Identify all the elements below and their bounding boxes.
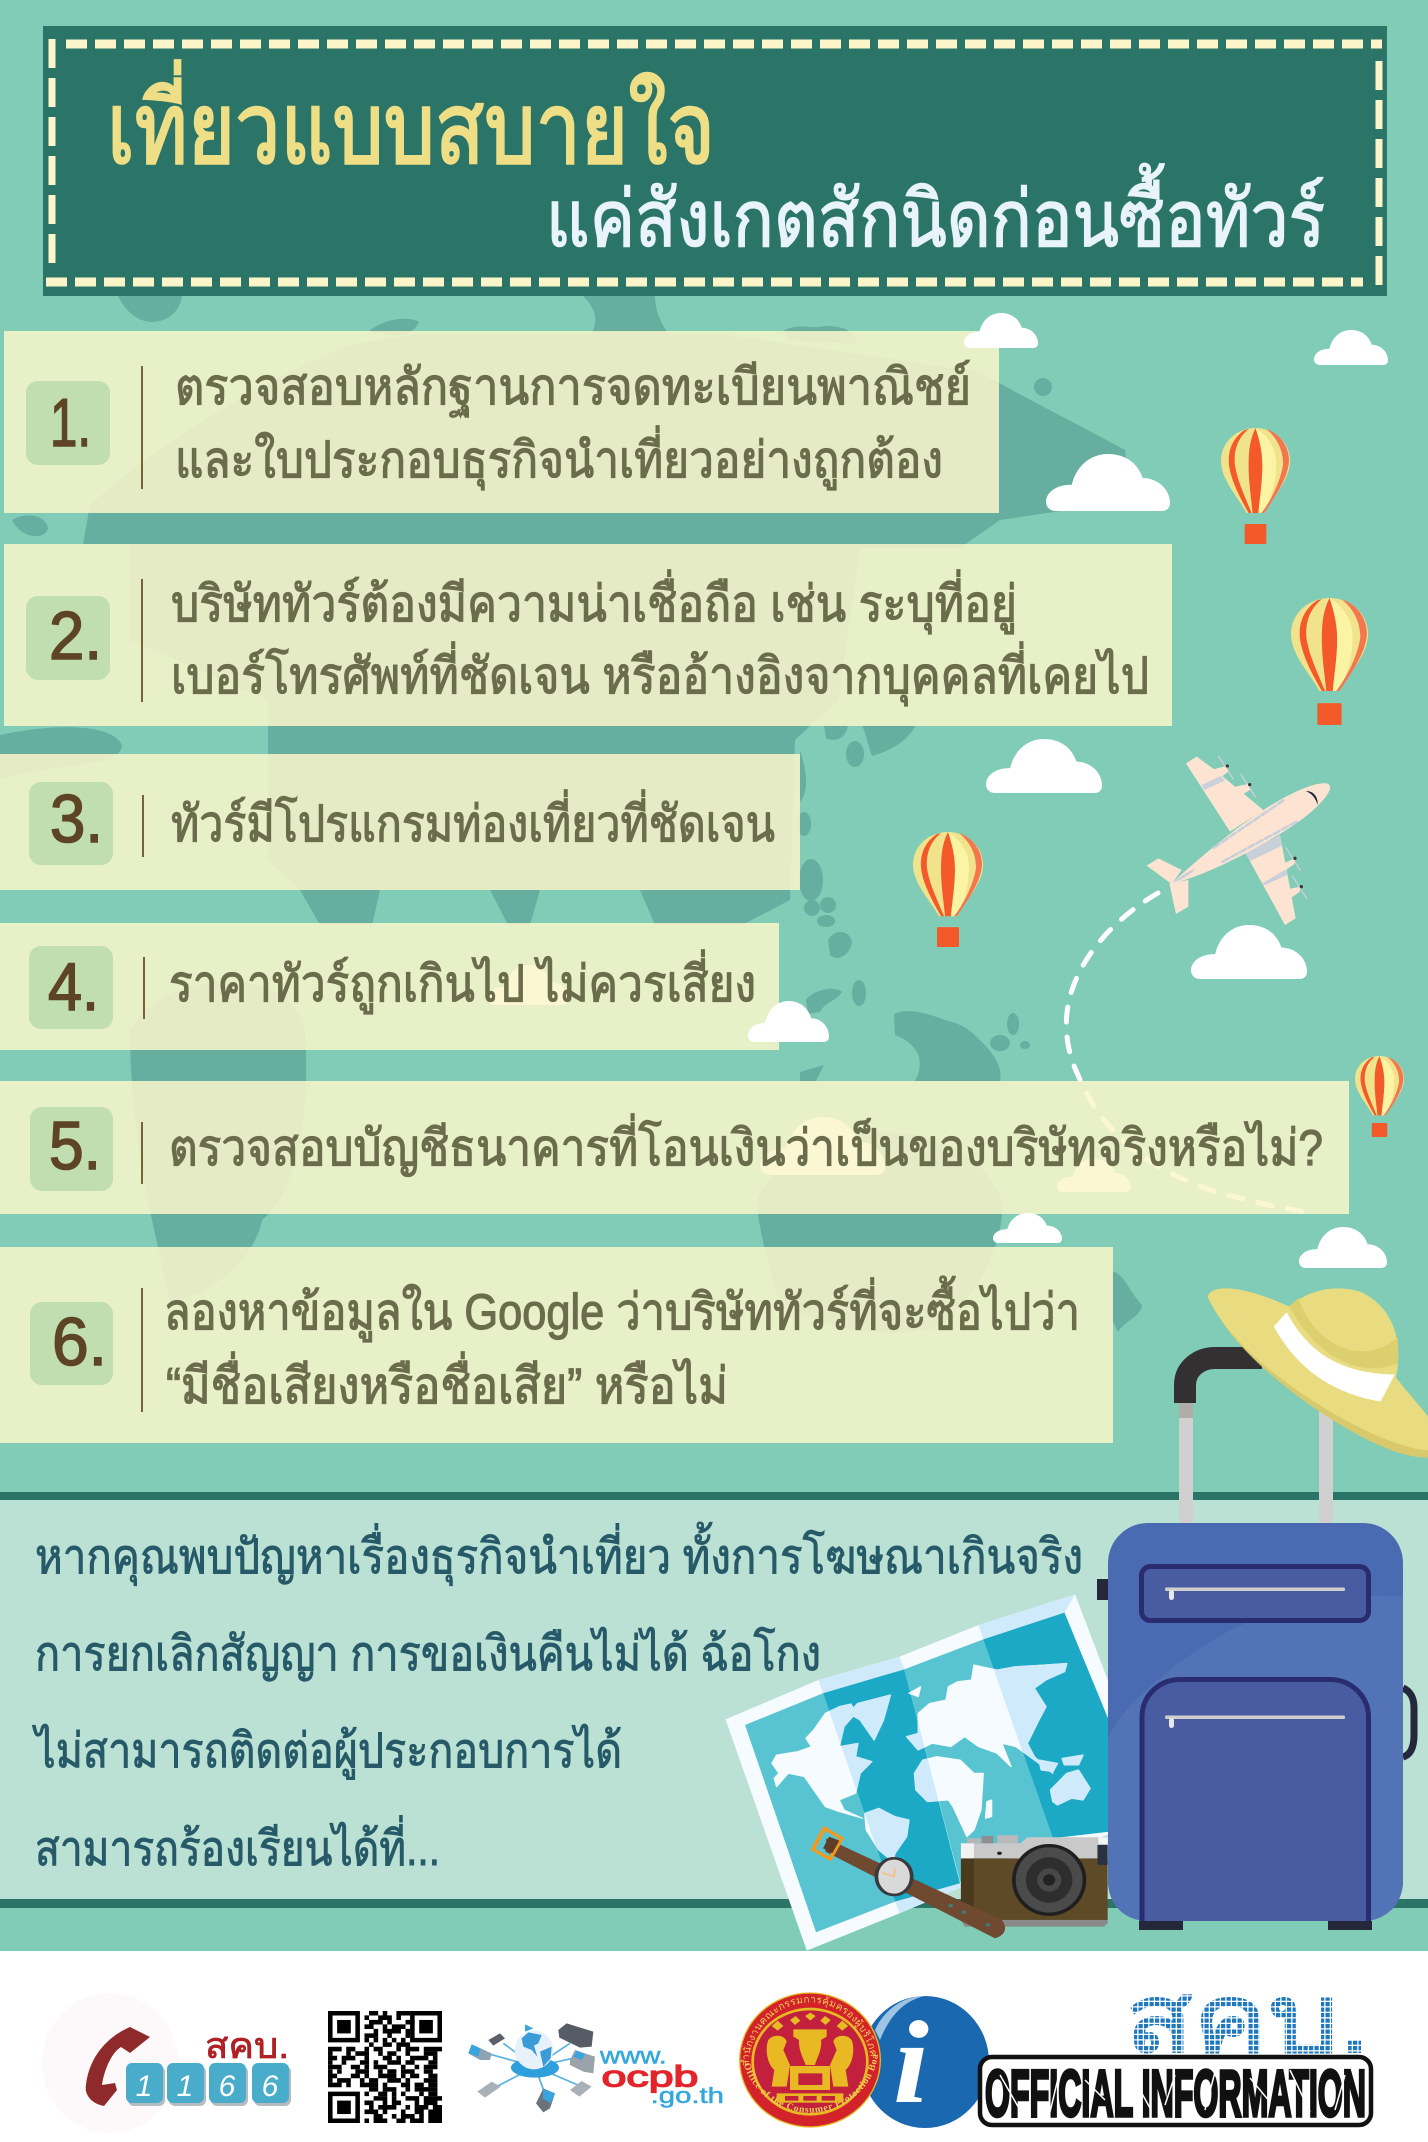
panel 6 bbox=[0, 1247, 1113, 1443]
panel 6 text: ลองหาข้อมูลใน Google ว่าบริษัททัวร์ที่จะซื้อไปว่า bbox=[164, 1276, 1080, 1342]
balloon 2 bbox=[1291, 598, 1368, 725]
balloon 1 bbox=[1221, 428, 1290, 544]
flight path line bbox=[1066, 893, 1305, 1212]
panel 1 text: ตรวจสอบหลักฐานการจดทะเบียนพาณิชย์ bbox=[175, 359, 971, 417]
panel 3 bbox=[0, 754, 800, 890]
number badge 1 bbox=[26, 381, 110, 465]
title banner bbox=[43, 26, 1387, 296]
clouds bbox=[748, 313, 1388, 1268]
panel 4 text: ราคาทัวร์ถูกเกินไป ไม่ควรเสี่ยง bbox=[169, 950, 756, 1014]
panel 3 text: ทัวร์มีโปรแกรมท่องเที่ยวที่ชัดเจน bbox=[171, 790, 775, 852]
number 5: 5. bbox=[49, 1108, 101, 1184]
title line 1: เที่ยวแบบสบายใจ bbox=[107, 60, 715, 185]
divider 6 bbox=[141, 1288, 143, 1412]
panel 1: และใบประกอบธุรกิจนำเที่ยวอย่างถูกต้อง bbox=[175, 426, 943, 490]
camera bbox=[961, 1835, 1108, 1927]
number badge 6 bbox=[30, 1302, 113, 1385]
panel 2 text: บริษัททัวร์ต้องมีความน่าเชื่อถือ เช่น ระบุที่อยู่ bbox=[171, 570, 1017, 634]
map continents bbox=[772, 1663, 1090, 1862]
contact band: การยกเลิกสัญญา การขอเงินคืนไม่ได้ ฉ้อโกง bbox=[35, 1626, 821, 1681]
panel 2: เบอร์โทรศัพท์ที่ชัดเจน หรืออ้างอิงจากบุคคลที่เคยไป bbox=[171, 642, 1149, 706]
panel 2 bbox=[4, 544, 1172, 726]
bottom pocket bbox=[1142, 1680, 1368, 1921]
number badge 2 bbox=[26, 596, 110, 680]
balloon 3 bbox=[913, 832, 983, 947]
number tiles: 1 bbox=[136, 2070, 152, 2103]
logo: information icon bbox=[861, 1996, 989, 2128]
number tiles bbox=[126, 2063, 291, 2106]
divider 4 bbox=[143, 957, 145, 1019]
balloon 4 bbox=[1355, 1056, 1404, 1137]
number badge 4 bbox=[29, 946, 113, 1029]
suitcase bbox=[1097, 1358, 1414, 1930]
logo: ocpb website: ocpb bbox=[602, 2061, 698, 2094]
title line 2: แค่สังเกตสักนิดก่อนซื้อทัวร์ bbox=[546, 163, 1325, 263]
world map silhouette bbox=[0, 296, 1142, 1333]
hotline agency text: สคบ. bbox=[205, 2025, 289, 2066]
seal of consumer protection board: Office of the Consumer Protection Board bbox=[744, 2054, 878, 2113]
logo: ocpb website bbox=[468, 2023, 724, 2112]
divider 5 bbox=[141, 1122, 143, 1184]
wristwatch bbox=[813, 1828, 1005, 1938]
number 3: 3. bbox=[50, 781, 103, 857]
number 1: 1. bbox=[50, 385, 91, 461]
number 4: 4. bbox=[48, 949, 99, 1025]
contact text: หากคุณพบปัญหาเรื่องธุรกิจนำเที่ยว ทั้งการโฆษณาเกินจริง bbox=[35, 1522, 1083, 1586]
folded world map bbox=[726, 1594, 1108, 1951]
footer background bbox=[0, 1951, 1428, 2142]
top pocket bbox=[1142, 1566, 1368, 1620]
divider 1 bbox=[141, 366, 143, 489]
panel 4 bbox=[0, 923, 779, 1050]
number badge 3 bbox=[29, 782, 113, 865]
logo: 1166 hotline bbox=[42, 1993, 291, 2133]
website text: www. bbox=[599, 2042, 667, 2068]
contact band: ไม่สามารถติดต่อผู้ประกอบการได้ bbox=[32, 1723, 622, 1780]
agency dotted wordmark: สคบ. bbox=[1125, 1966, 1370, 2073]
seal emblem bbox=[767, 2013, 853, 2103]
wheels bbox=[1139, 1921, 1183, 1930]
logo: ocpb website: .go.th bbox=[651, 2083, 724, 2108]
QR code bbox=[328, 2011, 442, 2123]
number 2: 2. bbox=[49, 598, 102, 674]
number badge 5 bbox=[30, 1107, 113, 1191]
ghost clouds beneath panels bbox=[488, 965, 1131, 1192]
hat bbox=[1208, 1288, 1428, 1458]
side fittings bbox=[1097, 1579, 1108, 1600]
panel 5 bbox=[0, 1081, 1349, 1214]
contact band bbox=[0, 1492, 1428, 1908]
handle bbox=[1185, 1358, 1262, 1403]
network icon bbox=[468, 2023, 595, 2112]
number tiles: 1 bbox=[177, 2070, 193, 2103]
panel 6: “มีชื่อเสียงหรือชื่อเสีย” หรือไม่ bbox=[166, 1352, 728, 1414]
panel 1 bbox=[4, 331, 999, 513]
seal ring text: สำนักงานคณะกรรมการคุ้มครองผู้บริโภค bbox=[740, 1996, 876, 2066]
contact band: สามารถร้องเรียนได้ที่... bbox=[35, 1815, 440, 1876]
airplane bbox=[1147, 756, 1330, 925]
divider 3 bbox=[142, 795, 144, 857]
case body bbox=[1108, 1523, 1403, 1921]
info letter: i bbox=[893, 1997, 929, 2128]
number 6: 6. bbox=[52, 1304, 107, 1380]
number tiles: 6 bbox=[219, 2070, 236, 2103]
phone handset bbox=[86, 2027, 150, 2106]
number tiles: 6 bbox=[262, 2070, 279, 2103]
divider 2 bbox=[141, 579, 143, 702]
